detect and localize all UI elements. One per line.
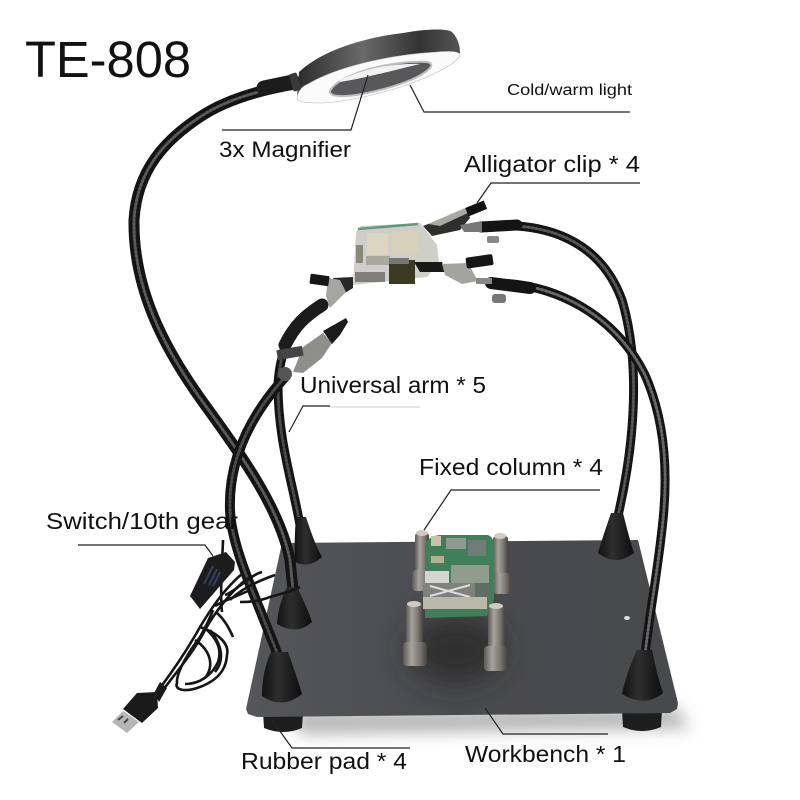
arm base: front left: [262, 652, 302, 703]
USB plug: [112, 682, 167, 733]
leader and label: cold/warm light: [410, 82, 633, 112]
USB cable: [160, 540, 300, 690]
arm base: magnifier: [277, 587, 312, 630]
clip: top right: [423, 201, 499, 243]
leader and label: universal arm: [289, 372, 486, 432]
leader and label: alligator clip: Alligator clip * 4: [464, 151, 640, 177]
workbench base plate: [246, 540, 678, 732]
leader and label: magnifier: [219, 75, 368, 162]
leader and label: rubber pad: Rubber pad * 4: [241, 748, 407, 774]
leader and label: rubber pad: [241, 720, 410, 774]
leader and label: fixed column: Fixed column * 4: [419, 454, 603, 480]
magnifier lamp head: [289, 29, 460, 103]
clip: left lower: [276, 318, 348, 381]
arm base: rear left: [295, 517, 322, 565]
clip: lower right: [414, 254, 506, 303]
leader and label: fixed column: [419, 454, 603, 530]
white LED ring: [297, 51, 460, 103]
column: back left: [412, 530, 432, 591]
clip: left upper: [309, 274, 353, 308]
universal arm: rear left: [278, 304, 322, 525]
magnifier gooseneck arm: [134, 82, 295, 590]
leader and label: workbench: [465, 708, 626, 767]
leader and label: switch: Switch/10th gear: [46, 508, 238, 534]
alligator clips: [276, 201, 506, 381]
leader and label: alligator clip: [464, 151, 640, 203]
universal arm: front right: [490, 283, 665, 655]
magnifier lens: [330, 62, 431, 96]
leader and label: magnifier: 3x Magnifier: [219, 137, 351, 162]
universal arm: back right: [480, 225, 634, 520]
universal arm: front left: [230, 376, 286, 655]
column shadow on plate: [407, 616, 503, 684]
column: front right: [484, 603, 507, 671]
column: front left: [403, 601, 427, 666]
leader and label: universal arm: Universal arm * 5: [300, 372, 486, 398]
rubber pad: left: [263, 712, 303, 732]
arm base: front right: [622, 650, 663, 701]
switch control box: [190, 552, 235, 609]
leader and label: switch: [46, 508, 238, 556]
plate hole: [624, 616, 630, 620]
circuit board held by clips: [353, 223, 439, 285]
column: back right: [493, 533, 511, 594]
circuit board: stacked: [423, 535, 494, 618]
lamp hinge: [289, 72, 301, 92]
shadow under workbench: [290, 708, 690, 734]
arm base: back right: [598, 513, 634, 560]
rubber pad: right: [622, 710, 662, 731]
leader and label: workbench: Workbench * 1: [465, 741, 626, 767]
title: TE-808: [25, 31, 191, 88]
fixed columns with stacked circuit board: [403, 530, 511, 671]
leader and label: cold/warm light: Cold/warm light: [507, 82, 633, 99]
